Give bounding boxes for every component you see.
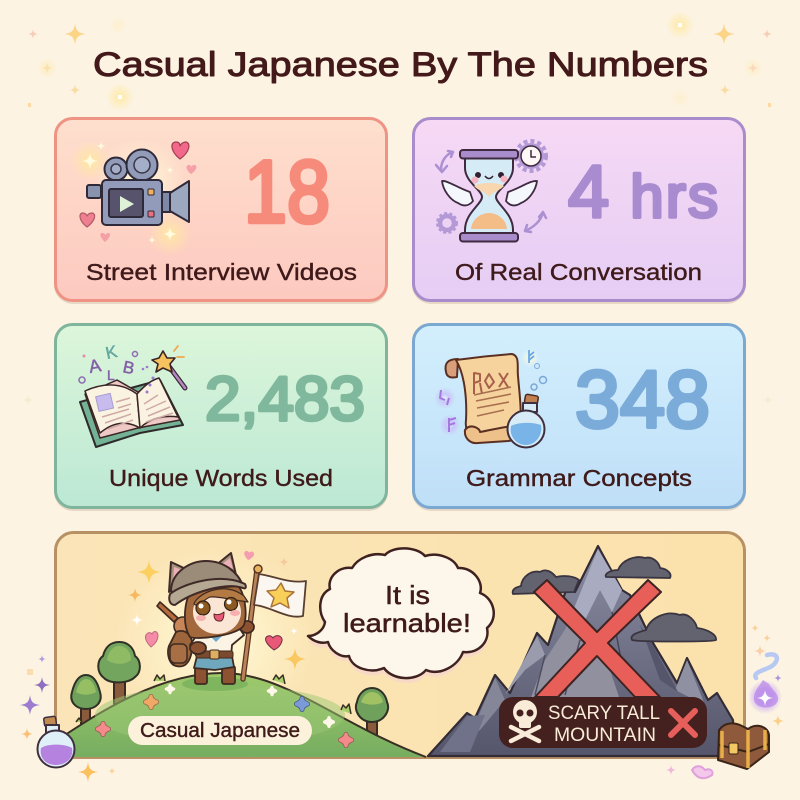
- panel: grammar concepts: [412, 324, 746, 511]
- icon: open book with wand: K: [104, 342, 120, 363]
- panel: unique words: [54, 324, 388, 511]
- panel: learnable banner: [56, 532, 744, 758]
- icon: open book with wand: L: [107, 367, 115, 383]
- hill and trees: [62, 642, 426, 757]
- warning pill: scary tall mountain: [499, 697, 707, 748]
- panel: real conversation: [412, 118, 746, 304]
- character: cat-ear adventurer with flag: [128, 551, 306, 684]
- stat: 18: 18: [244, 142, 330, 241]
- stat: 4 hrs: 4 hrs: [568, 150, 718, 233]
- title: Casual Japanese By The Numbers: [93, 46, 708, 84]
- panel: street interview videos: [54, 118, 388, 304]
- helmet: [169, 562, 188, 592]
- warning pill: scary tall mountain: MOUNTAIN: [554, 724, 656, 746]
- warning pill: scary tall mountain: SCARY TALL: [548, 702, 660, 724]
- icon: purple potion: [38, 716, 74, 768]
- illustration: scary mountain: [428, 546, 733, 756]
- label: grammar concepts: Grammar Concepts: [466, 465, 692, 491]
- background sparkles: [23, 11, 773, 405]
- speech text: [343, 580, 471, 638]
- icon: side sparkles left: [20, 655, 116, 782]
- icon: dark clouds: [513, 557, 716, 642]
- stat: 2,483: 2,483: [205, 365, 365, 434]
- stat: 348: 348: [575, 355, 710, 445]
- icon: red cross: [534, 580, 661, 697]
- label pill: casual japanese: [128, 716, 312, 745]
- icon: small red cross: [671, 711, 695, 735]
- icon: scroll and potion: [434, 349, 546, 448]
- icon: winged hourglass: [436, 141, 546, 242]
- body: [157, 602, 178, 622]
- label: unique words used: Unique Words Used: [109, 465, 333, 491]
- head: [185, 586, 246, 638]
- speech text: learnable!: [343, 608, 471, 638]
- flag: [243, 570, 257, 679]
- speech text: It is: [385, 580, 430, 610]
- label: of real conversation: Of Real Conversation: [455, 259, 702, 285]
- icon: open book with wand: B: [121, 357, 136, 378]
- icon: treasure chest: [718, 723, 769, 769]
- label pill: casual japanese: Casual Japanese: [140, 720, 300, 742]
- speech bubble: [308, 548, 494, 683]
- icon: video camera: [70, 139, 196, 256]
- icon: open book with wand: A: [87, 355, 103, 377]
- label: street interview videos: Street Interview Videos: [86, 259, 357, 285]
- icon: skull and crossbones: [511, 700, 539, 741]
- icon: purple flame: [748, 654, 782, 714]
- icon: side sparkles right: [666, 624, 784, 778]
- icon: open book with wand: [79, 342, 185, 447]
